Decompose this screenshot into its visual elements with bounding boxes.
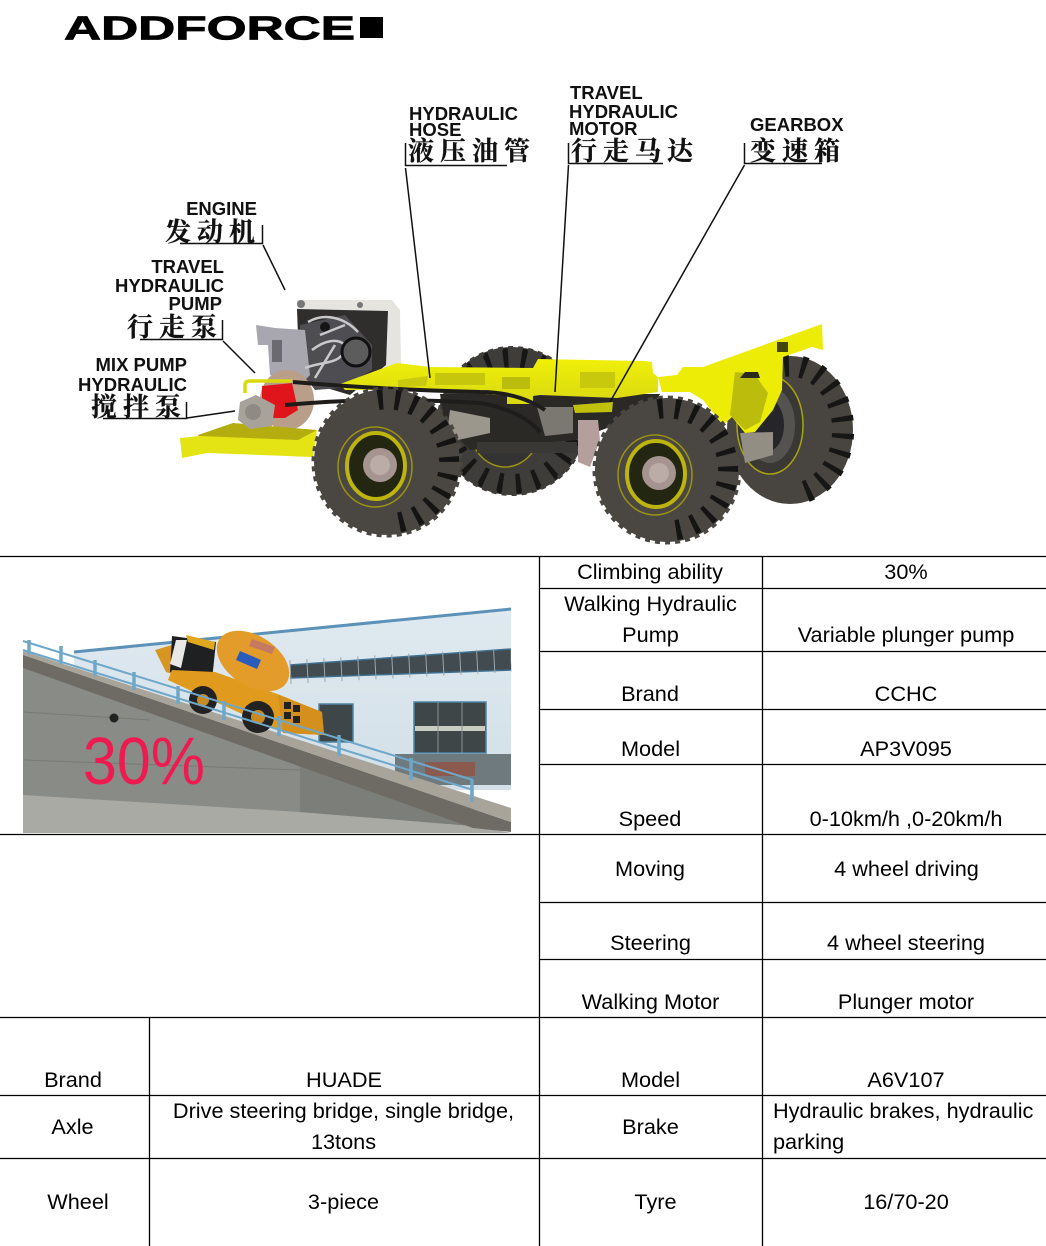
label: mix pump hydraulic: MIX PUMP (96, 354, 187, 375)
label: engine: 发动机 (165, 217, 261, 247)
ground (23, 790, 511, 833)
radiator (297, 300, 401, 395)
row: brand and model: HUADE (306, 1067, 382, 1092)
row: walking hydraulic pump: Pump (622, 622, 679, 647)
label: travel hydraulic motor (555, 82, 699, 392)
row: axle and brake: parking (773, 1129, 844, 1154)
row: walking hydraulic pump: Variable plunger pump (798, 622, 1014, 647)
label: engine (165, 198, 285, 290)
building (74, 609, 511, 790)
mix pump and red pump (238, 383, 298, 429)
label: travel hydraulic pump: TRAVEL (151, 256, 224, 277)
label: mix pump hydraulic (78, 354, 235, 422)
label: gearbox: GEARBOX (750, 114, 844, 135)
row: walking motor: Plunger motor (838, 989, 974, 1014)
row: climbing ability: 30% (884, 559, 928, 584)
row: brand: CCHC (875, 681, 937, 706)
row: axle and brake: 13tons (311, 1129, 376, 1154)
row: axle and brake: Drive steering bridge, single bridge, (173, 1098, 514, 1123)
row: walking motor (582, 989, 974, 1014)
engine (256, 315, 372, 390)
railing (23, 640, 473, 802)
photo: mixer truck climbing 30% slope (23, 557, 511, 833)
hoses (285, 382, 545, 432)
logo: ADDFORCE: ADDFORCE (64, 10, 355, 46)
window band (290, 649, 511, 678)
label: hydraulic hose: HYDRAULIC (409, 103, 518, 124)
far middle tyre (438, 347, 586, 495)
label: hydraulic hose: 液压油管 (408, 137, 536, 166)
row: model: AP3V095 (860, 736, 952, 761)
chassis illustration (180, 300, 853, 542)
row: wheel and tyre: Wheel (47, 1189, 109, 1214)
right rear tyre (727, 356, 853, 504)
row: walking hydraulic pump (564, 591, 1014, 647)
label: gearbox: 变速箱 (750, 136, 846, 166)
row: steering: Steering (610, 930, 691, 955)
row: model (621, 736, 952, 761)
logo: ADDFORCE (64, 10, 383, 46)
row: wheel and tyre: Tyre (634, 1189, 677, 1214)
label: mix pump hydraulic: 搅拌泵 (91, 392, 187, 422)
front right tyre (595, 398, 739, 542)
label: travel hydraulic motor: TRAVEL (570, 82, 643, 103)
label: travel hydraulic pump: 行走泵 (127, 313, 223, 342)
row: axle and brake: Hydraulic brakes, hydraulic (773, 1098, 1034, 1123)
label: mix pump hydraulic: HYDRAULIC (78, 374, 187, 395)
label: engine: ENGINE (186, 198, 257, 219)
label: travel hydraulic pump: PUMP (169, 293, 222, 314)
label: travel hydraulic pump: HYDRAULIC (115, 275, 224, 296)
front platform (180, 423, 317, 458)
row: brand and model: Model (621, 1067, 680, 1092)
row: brand and model (44, 1067, 945, 1092)
row: axle and brake: Brake (622, 1114, 679, 1139)
label: gearbox (610, 114, 846, 402)
row: speed: 0-10km/h ,0-20km/h (810, 806, 1002, 831)
row: brand (621, 681, 937, 706)
building windows (319, 702, 511, 785)
text: 30%: 30% (83, 724, 205, 799)
row: axle and brake: Axle (51, 1114, 94, 1139)
row: moving: 4 wheel driving (834, 856, 979, 881)
truck (155, 618, 324, 735)
concrete wall (23, 654, 473, 826)
label: travel hydraulic motor: HYDRAULIC (569, 101, 678, 122)
axle and driveshaft (440, 394, 773, 467)
row: climbing ability (577, 559, 928, 584)
row: axle and brake (51, 1098, 1034, 1154)
row: moving (615, 856, 979, 881)
label: travel hydraulic motor: 行走马达 (571, 137, 699, 166)
spec table grid (0, 556, 1046, 1246)
row: brand and model: Brand (44, 1067, 102, 1092)
label: hydraulic hose: HOSE (409, 119, 461, 140)
row: speed: Speed (619, 806, 681, 831)
row: speed (619, 806, 1002, 831)
row: climbing ability: Climbing ability (577, 559, 723, 584)
row: walking hydraulic pump: Walking Hydraulic (564, 591, 737, 616)
row: moving: Moving (615, 856, 685, 881)
label: travel hydraulic pump (115, 256, 255, 373)
yellow handrail (245, 381, 292, 393)
row: steering: 4 wheel steering (827, 930, 985, 955)
front left tyre (314, 389, 460, 535)
row: wheel and tyre (47, 1189, 949, 1214)
row: wheel and tyre: 16/70-20 (863, 1189, 949, 1214)
row: wheel and tyre: 3-piece (308, 1189, 379, 1214)
spec table text (44, 559, 1034, 1214)
row: model: Model (621, 736, 680, 761)
rear frame (658, 324, 823, 433)
ramp edge (23, 655, 511, 832)
row: brand and model: A6V107 (867, 1067, 945, 1092)
row: brand: Brand (621, 681, 679, 706)
label: hydraulic hose (406, 103, 536, 378)
row: walking motor: Walking Motor (582, 989, 719, 1014)
flywheel disc (260, 370, 314, 430)
label: travel hydraulic motor: MOTOR (569, 118, 638, 139)
main frame (340, 359, 658, 404)
row: steering (610, 930, 985, 955)
